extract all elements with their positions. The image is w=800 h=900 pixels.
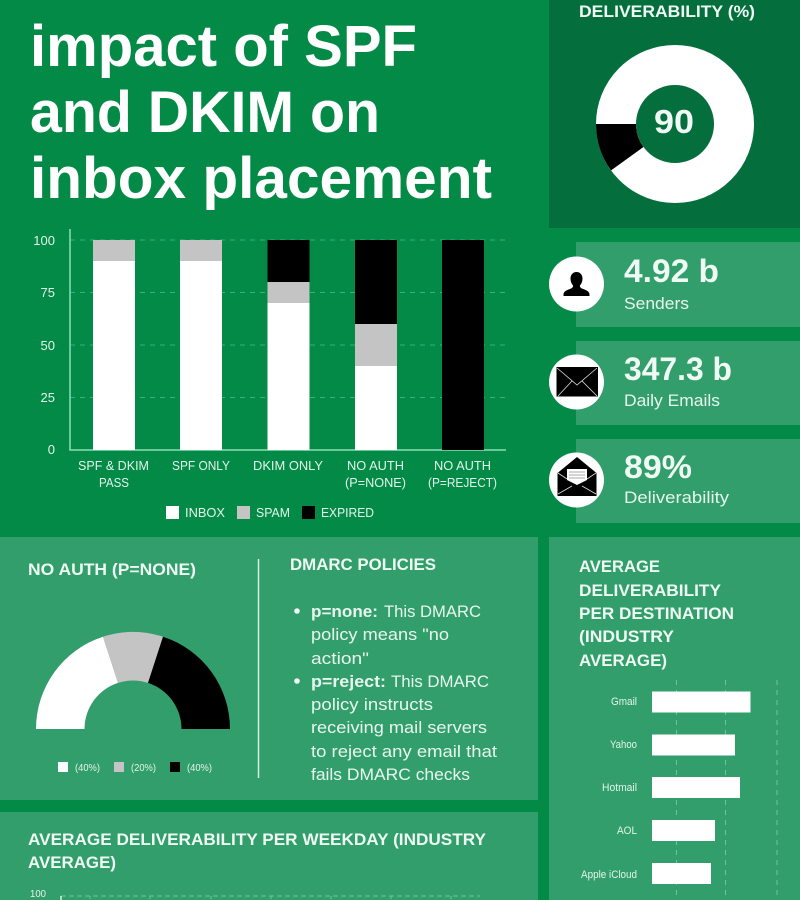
stat card: senders: 4.92 b (624, 253, 719, 289)
horizontal bar chart: Gmail (611, 696, 637, 708)
bar chart legend: SPAM (256, 505, 290, 520)
semicircle legend: (20%) (131, 763, 156, 774)
heading: per destination: PER DESTINATION (579, 604, 734, 623)
heading: per weekday: AVERAGE DELIVERABILITY PER WEEKDAY (INDUSTRY (28, 830, 487, 849)
horizontal bar chart: Hotmail (602, 782, 637, 794)
text block: DMARC policy list: p=reject: (311, 672, 386, 691)
horizontal bar chart: Yahoo (610, 739, 637, 751)
weekday chart top edge: 100 (30, 888, 46, 900)
horizontal bar chart: Apple iCloud (581, 869, 637, 881)
title: inbox placement (30, 146, 492, 211)
heading: DMARC policies: DMARC POLICIES (290, 555, 436, 574)
bar chart legend: EXPIRED (321, 505, 374, 520)
bar: SPF and DKIM pass (93, 240, 135, 450)
bar: no auth p=none (355, 240, 397, 450)
donut chart: 90 percent (596, 65, 734, 183)
stacked bar chart: inbox placement: 25 (41, 390, 55, 405)
bar chart legend (166, 505, 374, 520)
horizontal bar chart: AOL (617, 825, 637, 837)
title: impact of SPF (30, 14, 417, 79)
heading: deliverability: DELIVERABILITY (%) (579, 2, 755, 21)
heading: no auth: NO AUTH (P=NONE) (28, 560, 196, 579)
text block: DMARC policy list: This DMARC (384, 602, 481, 621)
x axis labels: SPF & DKIM (78, 458, 149, 473)
weekday chart top edge (30, 888, 480, 900)
stat card: senders (549, 242, 800, 327)
text block: DMARC policy list: action" (311, 649, 369, 668)
stat card: deliverability: 89% (624, 449, 692, 485)
text block: DMARC policy list: to reject any email that (311, 742, 497, 761)
stat card: deliverability (549, 439, 800, 523)
x axis labels: PASS (99, 475, 129, 490)
stat card: senders: Senders (624, 294, 689, 313)
semicircle legend: (40%) (187, 763, 212, 774)
bar: SPF only (180, 240, 222, 450)
panel: deliverability donut (549, 0, 800, 228)
text block: DMARC policy list: p=none: (311, 602, 378, 621)
stat card: deliverability: Deliverability (624, 488, 730, 507)
x axis labels: NO AUTH (434, 458, 491, 473)
stacked bar chart: inbox placement: 50 (41, 338, 55, 353)
x axis labels: NO AUTH (347, 458, 404, 473)
panel: deliverability per weekday (0, 812, 538, 900)
stacked bar chart: inbox placement: 0 (48, 442, 55, 457)
heading: per weekday: AVERAGE) (28, 853, 116, 872)
stat card: daily emails (549, 341, 800, 425)
stacked bar chart: inbox placement: 100 (33, 233, 55, 248)
title (30, 14, 492, 211)
stat card: daily emails: 347.3 b (624, 351, 732, 387)
horizontal bar chart (581, 680, 777, 900)
semicircle legend: (40%) (75, 763, 100, 774)
x axis labels: DKIM ONLY (253, 458, 323, 473)
panel: deliverability per destination (549, 537, 800, 900)
text block: DMARC policy list (294, 602, 497, 784)
bar: DKIM only (268, 240, 310, 450)
heading: per weekday (28, 830, 487, 872)
heading: per destination: DELIVERABILITY (579, 581, 722, 600)
semicircle chart (36, 632, 230, 729)
x axis labels: (P=REJECT) (428, 475, 497, 490)
heading: per destination: (INDUSTRY (579, 627, 675, 646)
stacked bar chart: inbox placement: 75 (41, 285, 55, 300)
bar chart legend: INBOX (185, 505, 225, 520)
title: and DKIM on (30, 80, 380, 145)
heading: per destination (579, 557, 734, 670)
stat card: daily emails: Daily Emails (624, 391, 720, 410)
semicircle legend (58, 762, 212, 774)
donut chart: 90 percent: 90 (654, 103, 694, 140)
text block: DMARC policy list: This DMARC (391, 672, 489, 691)
x axis labels: (P=NONE) (345, 475, 406, 490)
x axis labels: SPF ONLY (172, 458, 230, 473)
x axis labels (78, 458, 497, 490)
text block: DMARC policy list: fails DMARC checks (311, 765, 470, 784)
text block: DMARC policy list: policy instructs (311, 695, 433, 714)
heading: per destination: AVERAGE (579, 557, 660, 576)
bar: no auth p=reject (442, 240, 484, 450)
icon: person (564, 272, 590, 296)
panel: no auth and DMARC policies (0, 537, 538, 800)
icon: open envelope (558, 457, 596, 496)
icon: envelope (556, 367, 598, 396)
stacked bar chart: inbox placement (33, 229, 506, 520)
text block: DMARC policy list: receiving mail servers (311, 718, 487, 737)
heading: per destination: AVERAGE) (579, 651, 667, 670)
text block: DMARC policy list: policy means "no (311, 625, 449, 644)
